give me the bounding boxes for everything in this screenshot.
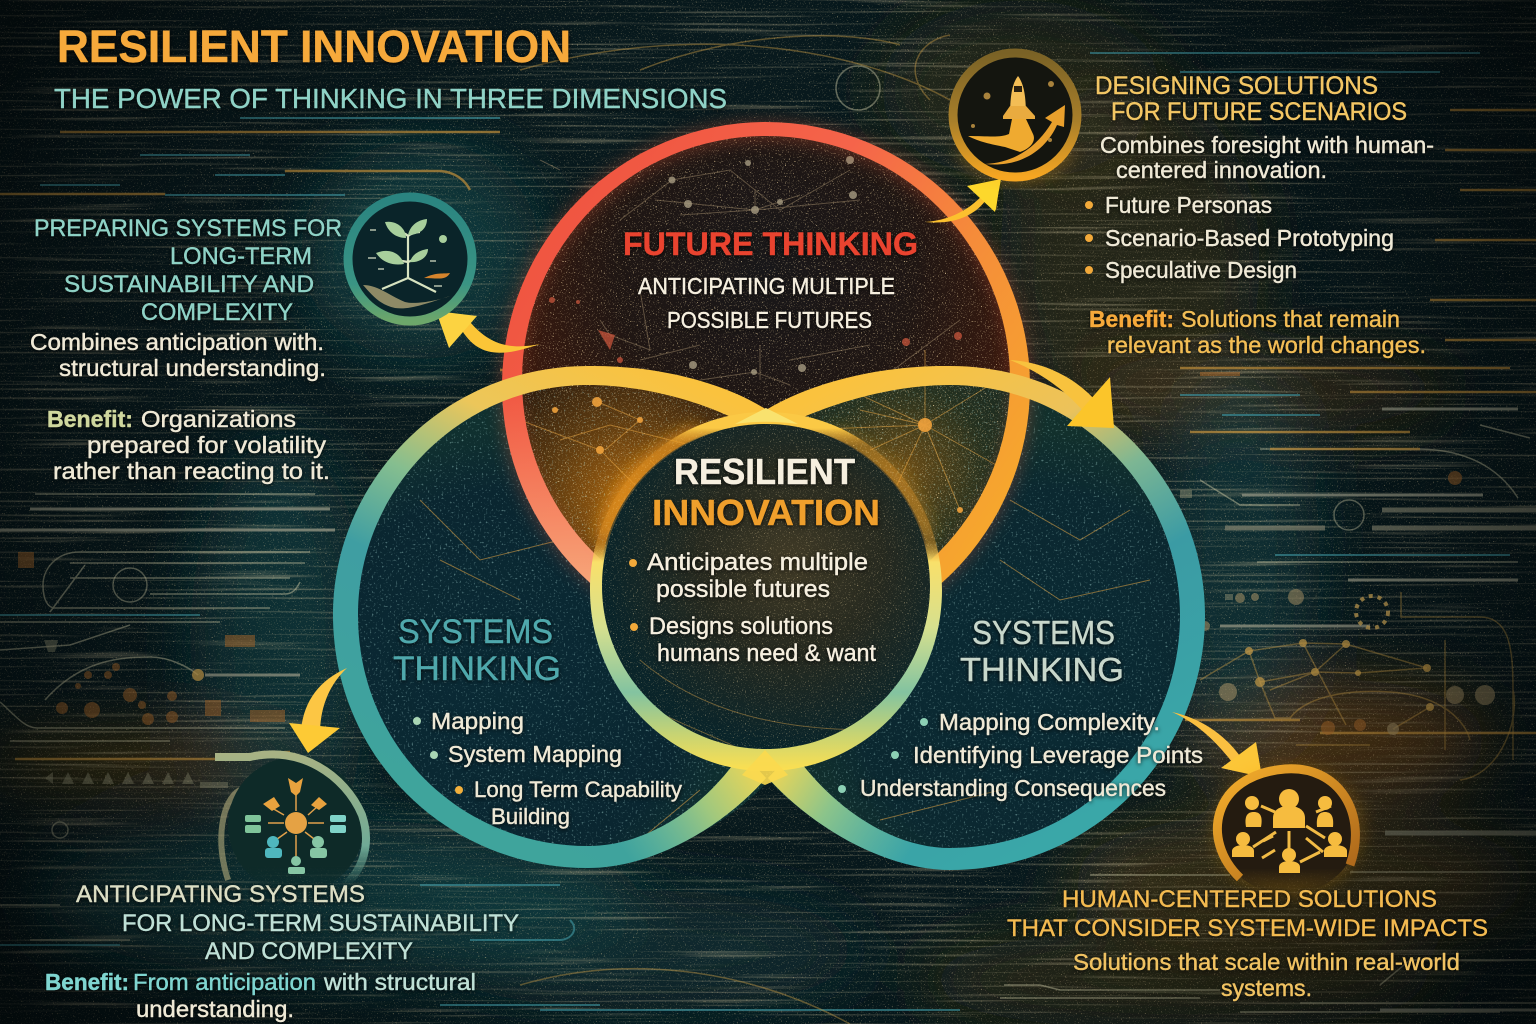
junction: bottom: [742, 750, 788, 785]
gold lines: [0, 110, 1536, 759]
label: future thinking: [623, 226, 918, 333]
label: resilient innovation centre: Anticipates multiple: [647, 549, 868, 576]
label: left systems thinking: Mapping: [431, 708, 524, 734]
label: left systems thinking: SYSTEMS: [398, 613, 553, 651]
label: right systems thinking: Mapping Complexity.: [939, 709, 1160, 735]
text block: preparing systems: prepared for volatility: [87, 432, 327, 458]
text block: designing solutions: Scenario-Based Prototyping: [1105, 225, 1394, 251]
glow around central disk: [604, 432, 928, 540]
junction: top: [735, 408, 798, 424]
text block: preparing systems: Benefit:: [47, 406, 133, 432]
ring: future thinking: [490, 122, 1030, 650]
text block: designing solutions: relevant as the world changes.: [1107, 332, 1426, 358]
text block: preparing systems: [30, 215, 342, 484]
text block: preparing systems: SUSTAINABILITY AND: [64, 271, 314, 298]
text block: designing solutions: Future Personas: [1105, 192, 1272, 218]
label: right systems thinking: SYSTEMS: [972, 614, 1115, 651]
title: RESILIENT INNOVATION: [57, 21, 571, 72]
text block: human-centered solutions: Solutions that scale within real-world: [1073, 949, 1460, 975]
text block: anticipating systems: [45, 881, 519, 1022]
text block: anticipating systems: AND COMPLEXITY: [205, 938, 413, 965]
label: future thinking: ANTICIPATING MULTIPLE: [638, 273, 895, 299]
text block: human-centered solutions: systems.: [1221, 975, 1312, 1001]
label: left systems thinking: [393, 613, 682, 829]
text block: designing solutions: DESIGNING SOLUTIONS: [1095, 72, 1378, 100]
label: future thinking: FUTURE THINKING: [623, 226, 918, 262]
icon: rocket: [953, 53, 1077, 178]
text block: preparing systems: structural understanding.: [59, 355, 326, 381]
label: right systems thinking: Understanding Consequences: [860, 775, 1166, 801]
text block: preparing systems: rather than reacting to it.: [53, 458, 330, 484]
circle interiors: [340, 130, 1200, 870]
arrow: to people icon: [1172, 712, 1262, 777]
label: right systems thinking: THINKING: [960, 651, 1124, 688]
label: right systems thinking: [838, 614, 1203, 801]
arrow: down to network icon: [289, 668, 347, 753]
arrow: to rocket icon: [925, 179, 1001, 223]
ring: left systems thinking: [333, 366, 767, 868]
text block: anticipating systems: with structural: [323, 969, 476, 995]
text block: human-centered solutions: THAT CONSIDER SYSTEM-WIDE IMPACTS: [1007, 915, 1488, 942]
subtitle: THE POWER OF THINKING IN THREE DIMENSIONS: [54, 83, 727, 114]
text block: designing solutions: Combines foresight with human-: [1100, 132, 1434, 158]
label: resilient innovation centre: [629, 451, 880, 667]
label: left systems thinking: Long Term Capability: [474, 777, 682, 802]
text block: designing solutions: Benefit:: [1089, 306, 1174, 332]
label: resilient innovation centre: RESILIENT: [674, 451, 855, 492]
label: future thinking: POSSIBLE FUTURES: [667, 307, 872, 333]
text block: designing solutions: Solutions that remain: [1181, 306, 1400, 332]
text block: preparing systems: Organizations: [141, 406, 296, 432]
text block: preparing systems: PREPARING SYSTEMS FOR: [34, 215, 342, 242]
label: resilient innovation centre: Designs solutions: [649, 613, 833, 640]
text block: designing solutions: centered innovation.: [1116, 157, 1327, 183]
label: left systems thinking: System Mapping: [448, 741, 622, 767]
text block: preparing systems: Combines anticipation with.: [30, 329, 324, 355]
icon: plant: [348, 197, 472, 321]
text block: anticipating systems: From anticipation: [133, 969, 316, 995]
text block: preparing systems: LONG-TERM: [170, 243, 312, 270]
text block: designing solutions: Speculative Design: [1105, 257, 1297, 283]
heavy pale lines: [0, 409, 1536, 1010]
text block: human-centered solutions: [1007, 886, 1488, 1001]
text block: designing solutions: FOR FUTURE SCENARIOS: [1111, 98, 1407, 126]
label: resilient innovation centre: possible futures: [656, 576, 830, 603]
label: left systems thinking: THINKING: [393, 650, 561, 688]
arrow: right to human-centred loop: [1010, 360, 1114, 428]
text block: anticipating systems: understanding.: [136, 996, 294, 1022]
text block: human-centered solutions: HUMAN-CENTERED SOLUTIONS: [1062, 886, 1437, 913]
arrow: to plant icon: [436, 311, 540, 353]
text block: preparing systems: COMPLEXITY: [141, 299, 293, 326]
label: resilient innovation centre: humans need & want: [657, 640, 876, 667]
ring: right systems thinking: [766, 366, 1205, 870]
constellation network lines: [420, 156, 1150, 840]
thin pale lines: [0, 425, 1536, 1012]
text block: designing solutions: [1085, 72, 1434, 358]
text block: anticipating systems: ANTICIPATING SYSTEMS: [76, 881, 365, 908]
icon: network of systems: [215, 754, 366, 893]
text block: anticipating systems: FOR LONG-TERM SUSTAINABILITY: [122, 910, 519, 937]
label: left systems thinking: Building: [491, 804, 570, 829]
central disk: [590, 408, 942, 785]
icon: connected people: [1212, 764, 1364, 896]
text block: anticipating systems: Benefit:: [45, 969, 129, 995]
label: right systems thinking: Identifying Leverage Points: [913, 742, 1203, 768]
label: resilient innovation centre: INNOVATION: [652, 492, 880, 533]
